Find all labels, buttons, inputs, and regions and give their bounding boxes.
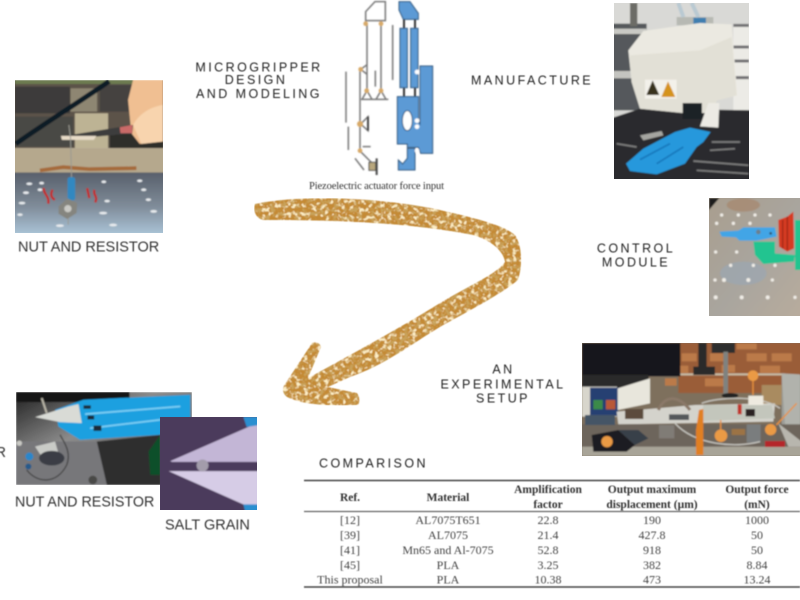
table row 2: 50 — [751, 528, 763, 542]
table row 5 — [317, 572, 770, 586]
table row 4: PLA — [437, 558, 460, 572]
heading: an experimental setup: SETUP — [476, 392, 530, 406]
caption: nut and resistor: NUT AND RESISTOR — [18, 240, 159, 256]
heading: control module: MODULE — [602, 256, 670, 270]
table row 3: 50 — [751, 543, 763, 557]
table header row — [340, 484, 789, 511]
table header row: Ref. — [340, 492, 360, 504]
table row 2: 21.4 — [538, 528, 558, 542]
table row 5: This proposal — [317, 572, 383, 586]
table row 1: 22.8 — [538, 513, 558, 527]
heading: an experimental setup — [440, 362, 566, 406]
photo: salt grain between gripper tips — [160, 417, 257, 510]
heading: microgripper design and modeling: AND MODELING — [196, 87, 322, 101]
heading: microgripper design and modeling: DESIGN — [225, 73, 287, 87]
table row 4: 3.25 — [538, 558, 558, 572]
heading: manufacture: MANUFACTURE — [471, 74, 593, 88]
comparison table — [304, 480, 800, 587]
table header row: Amplification — [514, 484, 582, 496]
table header row: factor — [533, 499, 563, 511]
table row 2: 427.8 — [638, 528, 666, 542]
table row 5: 473 — [643, 572, 661, 586]
table row 4: 382 — [643, 558, 661, 572]
caption: nut and resistor (bottom): NUT AND RESISTOR — [15, 494, 154, 510]
diagram: microgripper schematic — [346, 2, 433, 175]
diagram caption: Piezoelectric actuator force input — [309, 181, 444, 192]
table row 5: 13.24 — [744, 572, 770, 586]
table row 1: AL7075T651 — [415, 513, 481, 527]
table row 3: 918 — [643, 543, 661, 557]
photo: nut and resistor close-up — [15, 80, 163, 233]
table row 3 — [340, 543, 763, 557]
table row 5: PLA — [437, 572, 460, 586]
table row 3: 52.8 — [538, 543, 558, 557]
table row 1: [12] — [340, 513, 360, 527]
table header row: displacement (µm) — [606, 499, 698, 511]
photo: 3D printer manufacturing — [614, 3, 749, 179]
table row 1: 1000 — [745, 513, 769, 527]
table row 5: 10.38 — [534, 572, 562, 586]
arrow: gold glitter curved arrow — [254, 198, 521, 405]
photo: experimental setup — [582, 343, 800, 456]
heading: comparison: COMPARISON — [319, 456, 428, 470]
heading: an experimental setup: AN — [492, 362, 515, 376]
heading: an experimental setup: EXPERIMENTAL — [440, 378, 566, 392]
table header row: Output maximum — [608, 484, 697, 496]
table header row: (mN) — [744, 499, 770, 511]
table row 2: [39] — [340, 528, 360, 542]
heading: control module — [597, 242, 675, 270]
table row 3: [41] — [340, 543, 360, 557]
photo: blue gripper with nut and resistor — [16, 392, 192, 485]
table row 3: Mn65 and Al-7075 — [402, 543, 494, 557]
photo: control module — [709, 198, 800, 316]
heading: control module: CONTROL — [597, 242, 675, 256]
table row 4 — [340, 558, 768, 572]
table row 2 — [340, 528, 763, 542]
heading: microgripper design and modeling: MICROGRIPPER — [195, 60, 323, 74]
table row 4: 8.84 — [746, 558, 768, 572]
table row 1: 190 — [643, 513, 661, 527]
heading: microgripper design and modeling — [195, 60, 323, 101]
table row 4: [45] — [340, 558, 360, 572]
caption: salt grain: SALT GRAIN — [165, 518, 250, 534]
table header row: Material — [427, 492, 469, 504]
table row 2: AL7075 — [428, 528, 468, 542]
table row 1 — [340, 513, 769, 527]
table header row: Output force — [725, 484, 789, 496]
